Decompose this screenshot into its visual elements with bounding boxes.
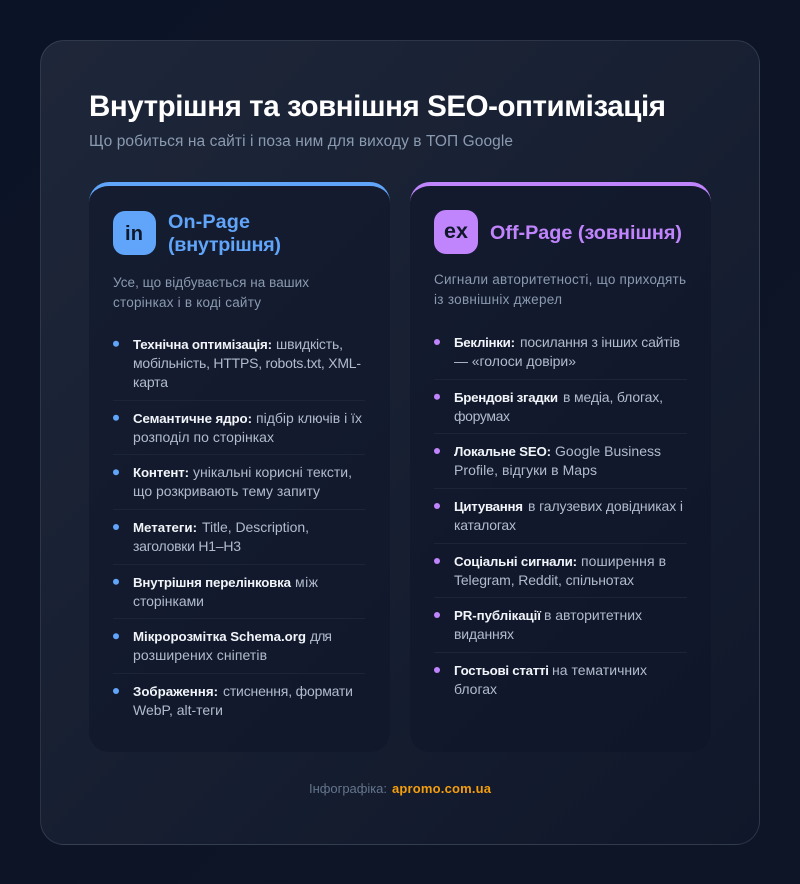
item: social signals: Telegram, Reddit, спільнотах xyxy=(454,572,634,588)
item: pr publications: в авторитетних xyxy=(544,607,642,623)
item: brand mentions: форумах xyxy=(454,408,510,424)
list: on-page items xyxy=(113,336,365,718)
icon: ex badge xyxy=(434,210,478,254)
heading: on-page: On-Page xyxy=(168,211,250,233)
item: semantic core: розподіл по сторінках xyxy=(133,429,274,445)
item: internal linking: між xyxy=(295,574,319,590)
item: citations: в галузевих довідниках і xyxy=(528,498,683,514)
off-page description xyxy=(434,272,686,307)
item: meta tags: Title, Description, xyxy=(202,519,309,535)
item: citations: Цитування xyxy=(454,499,523,514)
item: internal linking: сторінками xyxy=(133,593,204,609)
item: local seo xyxy=(434,443,661,478)
item: backlinks xyxy=(434,334,680,369)
heading: off-page: Off-Page (зовнішня) xyxy=(490,222,682,244)
item: technical optimization: швидкість, xyxy=(276,336,343,352)
item: citations: каталогах xyxy=(454,517,516,533)
item: guest posts: на тематичних xyxy=(552,662,647,678)
item: backlinks: Беклінки: xyxy=(454,335,515,350)
on-page description: Усе, що відбувається на ваших xyxy=(113,275,309,290)
title: Внутрішня та зовнішня SEO-оптимізація xyxy=(89,90,666,123)
item: semantic core: Семантичне ядро: xyxy=(133,411,252,426)
footer credit xyxy=(309,781,492,796)
subtitle: Що робиться на сайті і поза ним для виходу в ТОП Google xyxy=(89,133,513,150)
item: schema markup: для xyxy=(310,628,332,644)
item: schema markup xyxy=(113,628,332,663)
item: brand mentions: в медіа, блогах, xyxy=(563,389,663,405)
item: social signals: Соціальні сигнали: xyxy=(454,554,577,569)
item: images: стиснення, формати xyxy=(223,683,353,699)
panel: off-page xyxy=(410,182,711,752)
icon: in badge: in xyxy=(125,223,143,245)
item: schema markup: розширених сніпетів xyxy=(133,647,267,663)
item: local seo: Локальне SEO: xyxy=(454,444,551,459)
item: local seo: Profile, відгуки в Maps xyxy=(454,462,597,478)
item: images: WebP, alt-теги xyxy=(133,702,223,718)
item: images xyxy=(113,683,353,718)
icon: in badge xyxy=(113,211,156,255)
item: technical optimization: карта xyxy=(133,374,168,390)
on-page description: сторінках і в коді сайту xyxy=(113,295,261,310)
item: guest posts: блогах xyxy=(454,681,497,697)
off-page description: Сигнали авторитетності, що приходять xyxy=(434,272,686,287)
heading: on-page: (внутрішня) xyxy=(168,234,281,256)
item: technical optimization: Технічна оптимізація: xyxy=(133,337,272,352)
item: citations xyxy=(434,498,683,533)
item: brand mentions: Брендові згадки xyxy=(454,390,558,405)
footer credit: apromo.com.ua xyxy=(392,781,492,796)
item: semantic core: підбір ключів і їх xyxy=(256,410,362,426)
item: social signals xyxy=(434,553,666,588)
item: schema markup: Мікророзмітка Schema.org xyxy=(133,629,306,644)
item: internal linking xyxy=(113,574,319,609)
item: pr publications: PR-публікації xyxy=(454,608,541,623)
item: guest posts: Гостьові статті xyxy=(454,663,549,678)
item: content xyxy=(113,464,352,499)
item: technical optimization xyxy=(113,336,361,390)
heading: on-page xyxy=(168,211,281,256)
item: meta tags: Метатеги: xyxy=(133,520,197,535)
off-page description: із зовнішніх джерел xyxy=(434,292,562,307)
item: technical optimization: мобільність, HTTPS, robots.txt, XML- xyxy=(133,355,361,371)
item: content: що розкривають тему запиту xyxy=(133,483,320,499)
item: pr publications xyxy=(434,607,642,642)
icon: ex badge: ex xyxy=(444,219,468,243)
item: images: Зображення: xyxy=(133,684,218,699)
item: content: унікальні корисні тексти, xyxy=(193,464,352,480)
item: pr publications: виданнях xyxy=(454,626,514,642)
list: off-page items xyxy=(434,334,687,697)
item: content: Контент: xyxy=(133,465,189,480)
item: internal linking: Внутрішня перелінковка xyxy=(133,575,292,590)
item: meta tags: заголовки H1–H3 xyxy=(133,538,241,554)
panel: on-page xyxy=(89,182,390,752)
on-page description xyxy=(113,275,309,310)
item: guest posts xyxy=(434,662,647,697)
footer credit: Інфографіка: xyxy=(309,781,387,796)
item: social signals: поширення в xyxy=(581,553,666,569)
item: brand mentions xyxy=(434,389,663,424)
item: local seo: Google Business xyxy=(555,443,661,459)
item: meta tags xyxy=(113,519,309,554)
item: backlinks: — «голоси довіри» xyxy=(454,353,576,369)
item: semantic core xyxy=(113,410,362,445)
item: backlinks: посилання з інших сайтів xyxy=(520,334,680,350)
